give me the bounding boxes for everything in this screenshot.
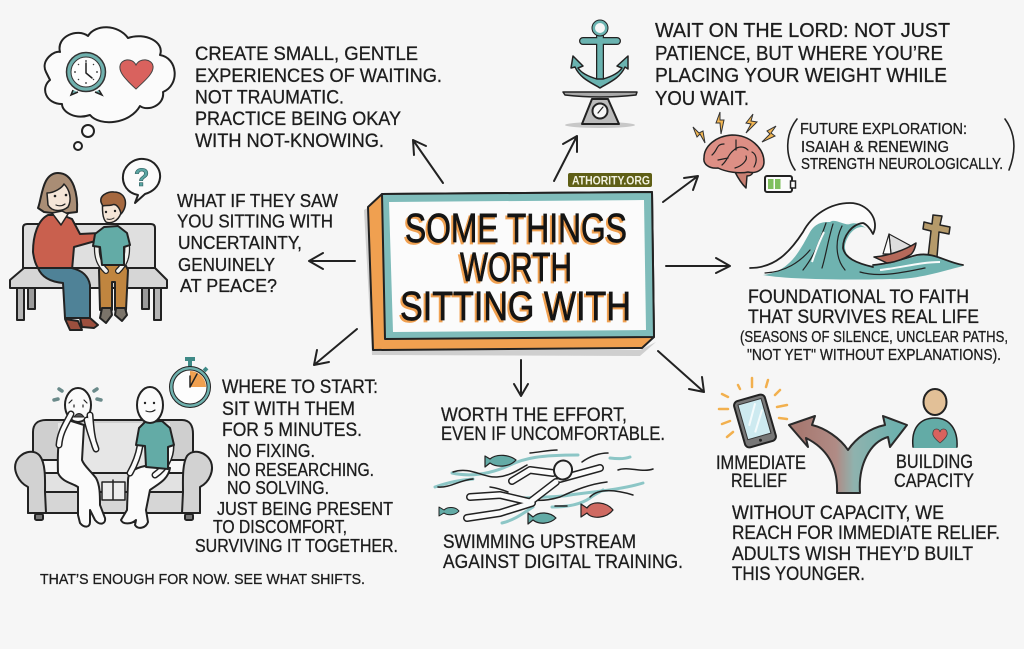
text: what if they saw you: AT PEACE? [180, 276, 277, 296]
icon: glowing phone [719, 378, 787, 448]
speech bubble with question mark [123, 159, 160, 203]
text: without capacity: ADULTS WISH THEY’D BUILT [732, 544, 973, 565]
text: where to start: SURVIVING IT TOGETHER. [195, 536, 398, 556]
text: where to start: NO FIXING. [227, 441, 315, 461]
title [400, 205, 631, 329]
bench [10, 224, 167, 320]
text: where to start: SIT WITH THEM [222, 399, 355, 420]
icon: brain with lightning and battery [693, 112, 796, 192]
text: foundational to faith: FOUNDATIONAL TO FAITH [748, 287, 969, 308]
illustration: two people on couch [15, 387, 212, 528]
clock [66, 52, 106, 95]
icon: anchor on scale [563, 20, 637, 128]
text: create small experiences: EXPERIENCES OF WAITING. [195, 66, 442, 87]
distressed person [54, 388, 105, 527]
title: SITTING WITH [400, 283, 631, 329]
text: what if they saw you: WHAT IF THEY SAW [177, 191, 338, 211]
woman [33, 173, 100, 330]
text: what if they saw you: UNCERTAINTY, [178, 233, 302, 253]
icon: thought cloud with clock and heart [45, 27, 175, 150]
text: swimming upstream [443, 532, 683, 573]
brain [704, 135, 764, 188]
text: where to start [195, 377, 398, 556]
text: where to start: FOR 5 MINUTES. [222, 420, 362, 441]
text: create small experiences: PRACTICE BEING OKAY [195, 109, 401, 130]
text: swimming upstream: AGAINST DIGITAL TRAINING. [443, 552, 683, 573]
arrow: to where to start [314, 329, 357, 365]
diagram: forking arrow [789, 416, 907, 493]
icon: person with heart [913, 389, 957, 448]
calm person [121, 387, 174, 528]
text: create small experiences: NOT TRAUMATIC. [195, 88, 344, 108]
label: building capacity: CAPACITY [894, 471, 974, 492]
icon: stopwatch [170, 359, 210, 408]
scale [563, 92, 637, 124]
text: create small experiences [195, 44, 442, 152]
text: without capacity: THIS YOUNGER. [732, 564, 865, 585]
text: without capacity: WITHOUT CAPACITY, WE [732, 503, 944, 524]
text: future exploration [788, 119, 1014, 173]
text: wait on the lord [655, 20, 950, 110]
text: worth the effort: EVEN IF UNCOMFORTABLE. [441, 424, 665, 445]
text: create small experiences: WITH NOT-KNOWING. [195, 131, 384, 152]
text: what if they saw you: YOU SITTING WITH [177, 212, 333, 232]
text: closing line: THAT’S ENOUGH FOR NOW. SEE WHAT SHIFTS. [40, 571, 365, 588]
teal frame [382, 192, 654, 339]
text: worth the effort: WORTH THE EFFORT, [441, 405, 627, 426]
arrow: to brain [663, 176, 698, 202]
title: SOME THINGS [405, 205, 627, 251]
label: building capacity: BUILDING [896, 452, 973, 473]
text: where to start: JUST BEING PRESENT [217, 499, 393, 519]
text: what if they saw you: GENUINELY [178, 255, 275, 275]
arrow: to capacity fork [658, 351, 704, 392]
text: future exploration: FUTURE EXPLORATION: [800, 121, 967, 138]
text: without capacity [732, 503, 1000, 585]
text: where to start: WHERE TO START: [222, 377, 378, 398]
text: where to start: TO DISCOMFORT, [213, 517, 347, 537]
battery [765, 176, 796, 192]
text: without capacity: REACH FOR IMMEDIATE RELIEF. [732, 523, 1000, 544]
couch [15, 420, 212, 520]
text: foundational to faith [740, 287, 1008, 364]
boat [874, 234, 916, 263]
text: where to start: NO SOLVING. [227, 478, 329, 498]
badge: athority.org: ATHORITY.ORG [572, 176, 650, 188]
text: foundational to faith: THAT SURVIVES REAL LIFE [748, 307, 979, 328]
fish [439, 455, 613, 524]
text: wait on the lord: PATIENCE, BUT WHERE YOU’RE [655, 43, 943, 65]
label: immediate relief: RELIEF [731, 471, 787, 492]
cross [923, 215, 950, 257]
illustration: wave, boat and cross [750, 203, 963, 280]
swimmer [467, 458, 600, 518]
text: create small experiences: CREATE SMALL, GENTLE [195, 44, 418, 65]
illustration: parent and child on bench [10, 159, 167, 330]
arrow: to what if [309, 253, 355, 269]
text: wait on the lord: YOU WAIT. [655, 88, 749, 110]
speech bubble with question mark: ? [134, 164, 149, 192]
label: immediate relief: IMMEDIATE [716, 453, 806, 474]
boy [93, 192, 130, 323]
text: worth the effort [441, 405, 665, 445]
heart [120, 60, 153, 89]
illustration: swimmer upstream [435, 450, 653, 524]
panel: central title box [364, 192, 656, 356]
arrow: to wave [666, 258, 730, 273]
white title panel [389, 200, 646, 332]
text: where to start: NO RESEARCHING. [227, 460, 374, 480]
water lines [435, 450, 653, 523]
arrow: to anchor [554, 136, 577, 181]
orange box side [368, 192, 654, 350]
text: wait on the lord: WAIT ON THE LORD: NOT JUST [655, 20, 950, 42]
wave [785, 203, 875, 256]
text: what if they saw you [177, 191, 338, 296]
text: swimming upstream: SWIMMING UPSTREAM [443, 532, 636, 553]
label: immediate relief [716, 453, 806, 492]
text: future exploration: ISAIAH & RENEWING [801, 139, 949, 156]
title: WORTH [460, 244, 572, 290]
text: wait on the lord: PLACING YOUR WEIGHT WHILE [655, 65, 947, 87]
anchor [571, 20, 628, 88]
label: building capacity [894, 452, 974, 492]
lightning bolts [693, 112, 776, 143]
arrow: to small experiences [413, 140, 443, 183]
arrow: to worth the effort [514, 360, 528, 396]
